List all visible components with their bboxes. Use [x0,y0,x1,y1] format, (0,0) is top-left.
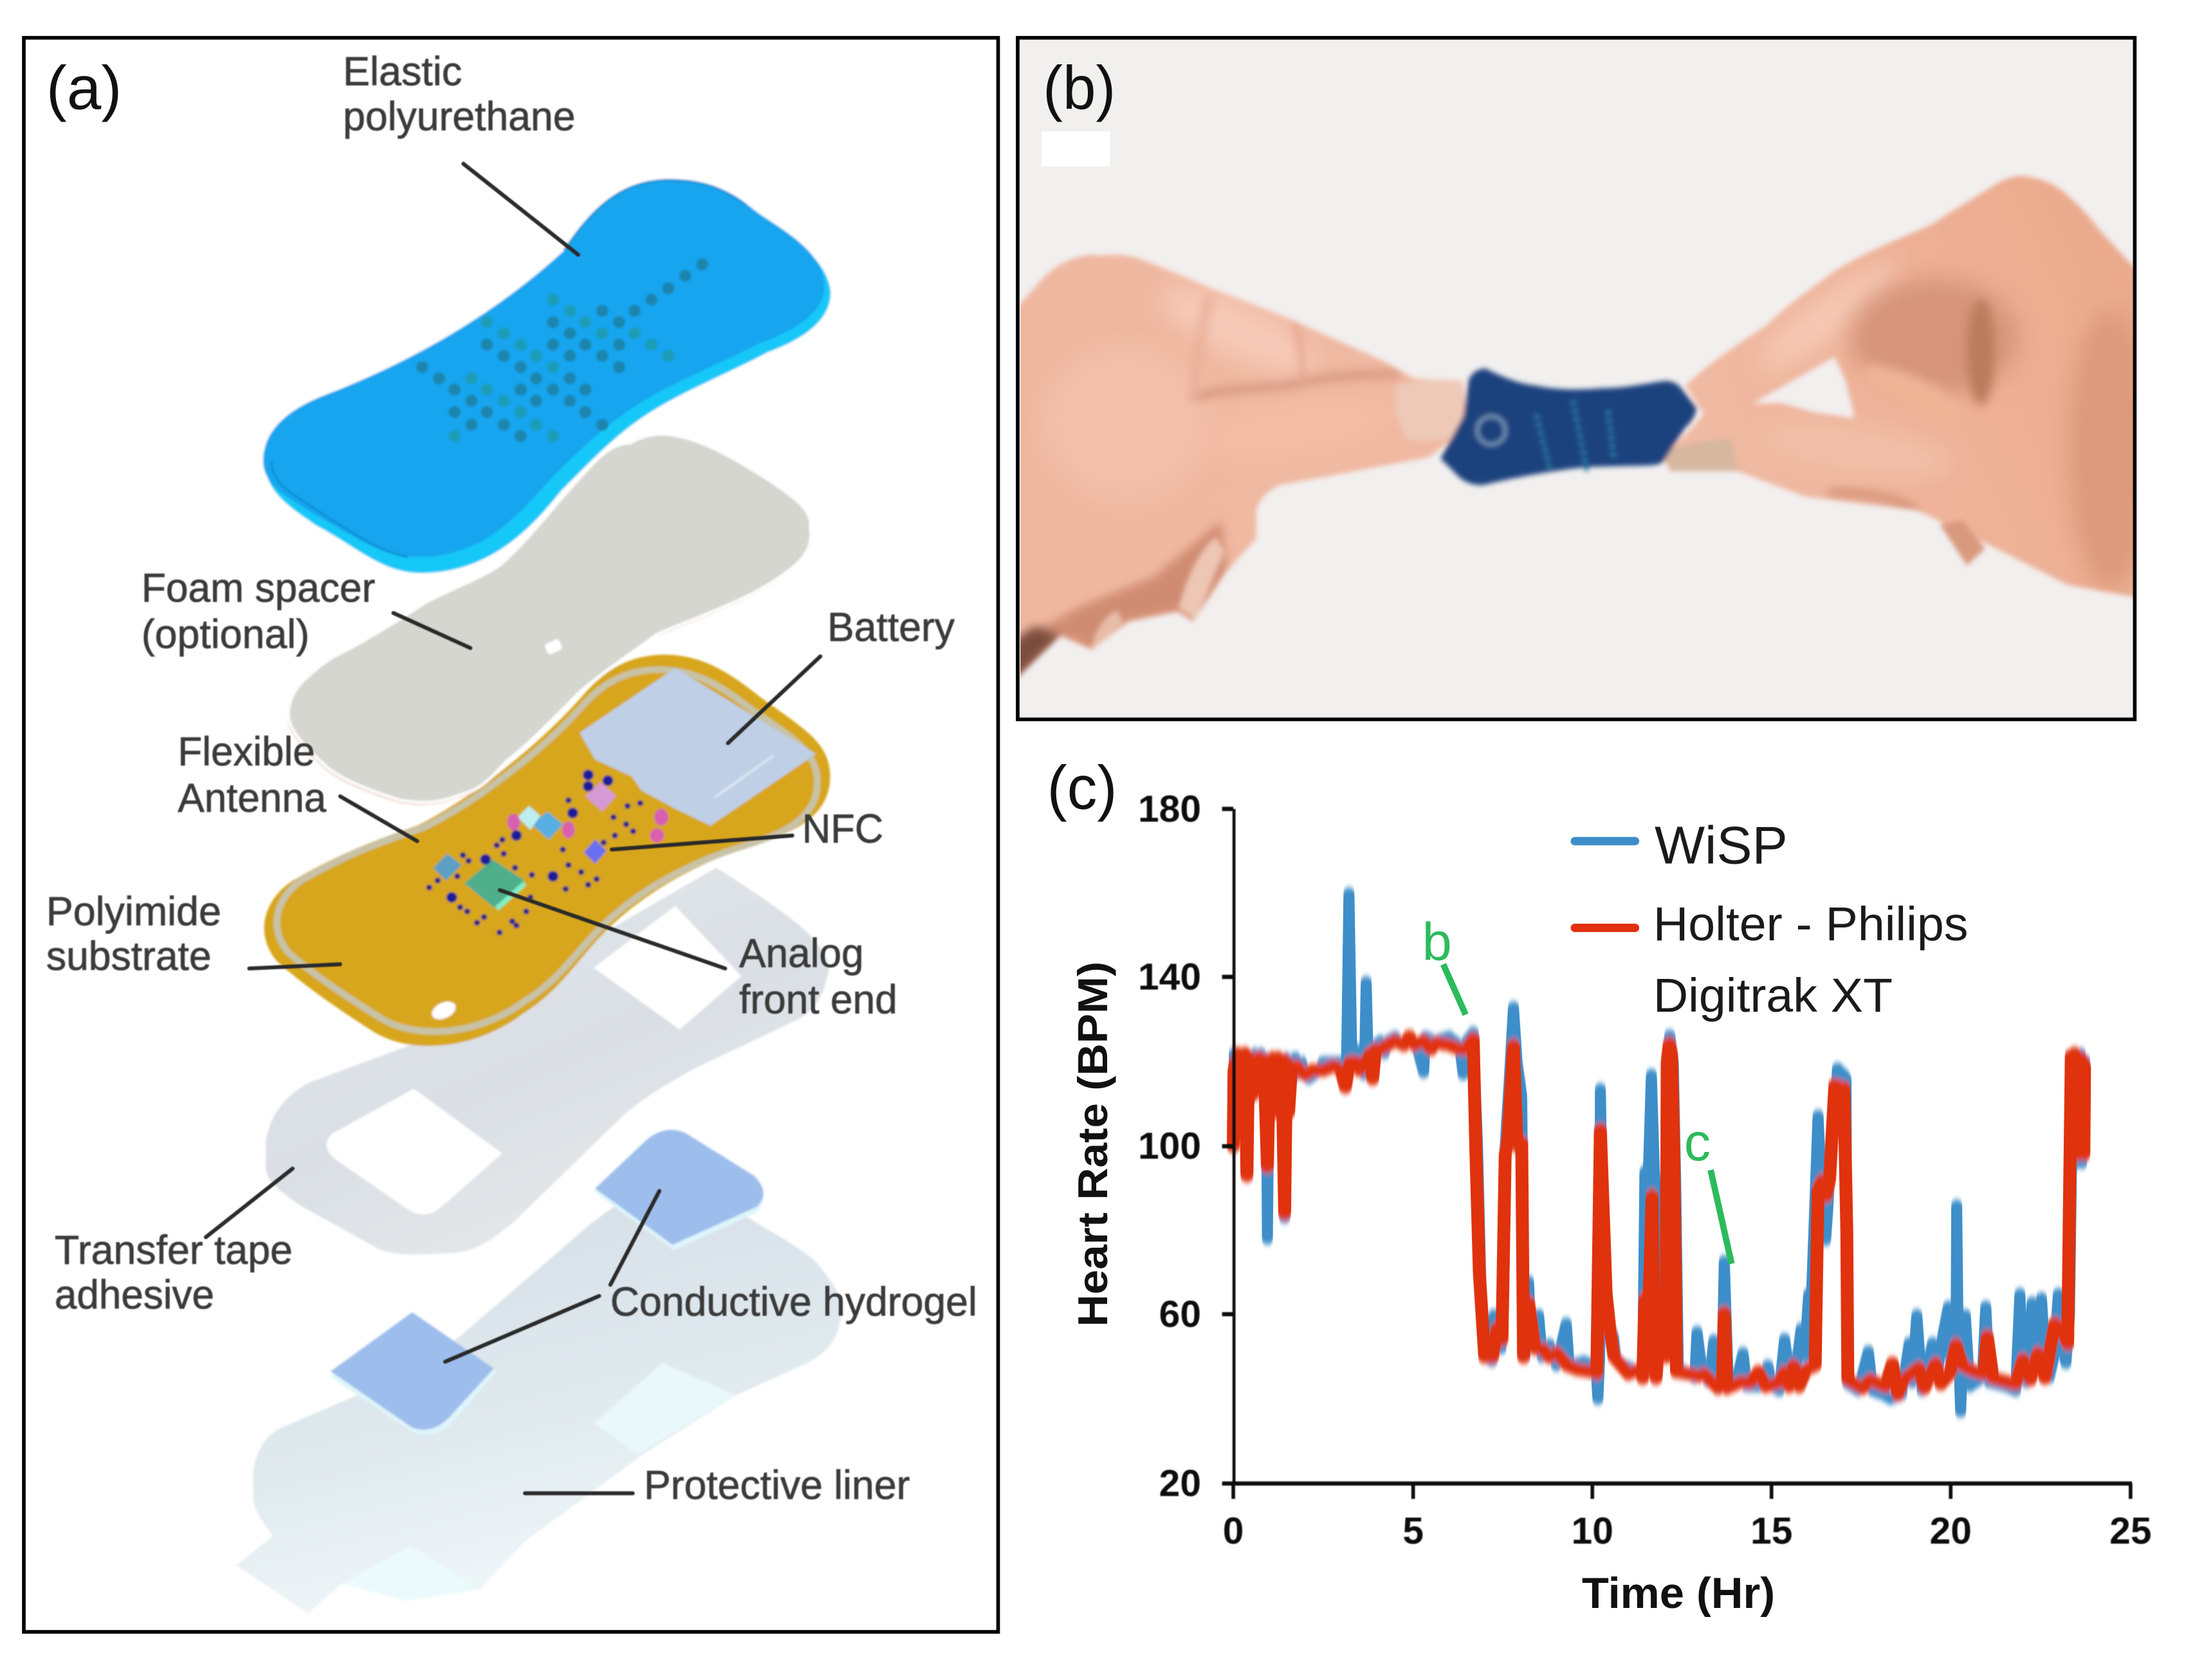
illustration: patch layers [236,180,841,1613]
component labels [46,50,977,1508]
chart: y-axis tick labels: 180 [1138,788,1201,830]
label: battery: Battery [827,605,955,650]
palm shadow [1850,278,2019,397]
component labels: polyurethane [343,94,575,139]
component labels: Antenna [178,776,327,821]
label: elastic polyurethane: Elastic [343,50,462,95]
trace: Holter [1233,1037,2084,1395]
panel: (b) photo of stretched patch [1006,38,2153,719]
chart: x-axis title: Time (Hr) [1582,1569,1775,1618]
sensor dot grid [422,264,703,436]
chart: y-axis title: Heart Rate (BPM) [1069,962,1116,1327]
label: flexible antenna: Flexible [178,729,315,774]
component labels: adhesive [55,1273,214,1318]
label: polyimide substrate: Polyimide [46,889,221,934]
chart: x-axis tick labels: 10 [1572,1510,1613,1552]
lower finger shadow [1024,520,1230,668]
leader lines [206,164,820,1493]
panel: (a) exploded layer diagram [24,38,998,1632]
gap between index finger and thumb [1753,357,1854,417]
photo illustration [1006,176,2153,689]
left hand [1006,255,1466,689]
label: foam spacer: Foam spacer [142,566,375,611]
annotation: c [1684,1112,1732,1264]
panel label (a): (a) [46,54,122,123]
chart: x-axis tick labels: 0 [1223,1510,1244,1552]
chart: axes and ticks [1222,809,2132,1499]
right hand [1663,176,2153,599]
layer: polyimide substrate with antenna [264,655,830,1046]
chart: x-axis tick labels: 5 [1402,1510,1424,1552]
label: NFC: NFC [802,807,883,852]
chart: y-axis tick labels [1138,788,1201,1504]
legend [1575,816,1968,1022]
crease between index finger and thumb [1193,374,1400,398]
panel: (c) heart rate chart [1047,754,2152,1618]
chart: traces [1233,893,2085,1412]
small finger [1940,520,1985,565]
chart: y-axis tick labels: 60 [1159,1293,1201,1335]
white patch behind label [1042,132,1110,167]
layer: foam spacer [287,434,811,805]
analog front end chip [464,859,525,909]
trace: WiSP [1233,893,2085,1412]
panel label (c): (c) [1047,754,1117,823]
label: analog front end: Analog [739,931,864,976]
layer: conductive hydrogel pads [331,1130,764,1435]
thumbnail [1395,379,1466,441]
annotation: c: c [1684,1112,1711,1172]
chart: x-axis tick labels: 20 [1930,1510,1972,1552]
chart: x-axis tick labels: 25 [2109,1510,2152,1552]
thumbnail [1666,439,1739,471]
legend: Holter - Philips [1653,897,1968,951]
small components [429,775,668,933]
trace: Holter fill bands [1234,1054,1292,1121]
component labels: substrate [46,934,212,979]
label: protective liner: Protective liner [644,1463,910,1508]
legend: Digitrak XT [1653,969,1893,1022]
annotation: b: b [1422,912,1452,972]
label: conductive hydrogel: Conductive hydrogel [611,1279,977,1324]
circuit components [429,668,816,933]
antenna trace [277,670,818,1032]
legend: WiSP [1655,816,1788,875]
battery [580,668,816,826]
component labels: (optional) [142,612,309,657]
layer: transfer tape adhesive [266,868,829,1254]
component labels: front end [739,977,897,1022]
chart: y-axis tick labels: 20 [1159,1463,1201,1504]
finger nails [1179,537,1224,619]
layer: protective liner [236,1191,841,1613]
annotation: b [1422,912,1465,1015]
chart: x-axis tick labels [1223,1510,2152,1552]
chart: y-axis tick labels: 140 [1138,956,1201,998]
stretched patch [1440,369,1696,485]
chart: x-axis tick labels: 15 [1750,1510,1792,1552]
mounting hole [429,998,459,1023]
chart: y-axis tick labels: 100 [1138,1126,1201,1167]
layer: elastic polyurethane [263,180,833,575]
panel label (b): (b) [1043,54,1116,123]
label: transfer tape adhesive: Transfer tape [55,1228,293,1273]
